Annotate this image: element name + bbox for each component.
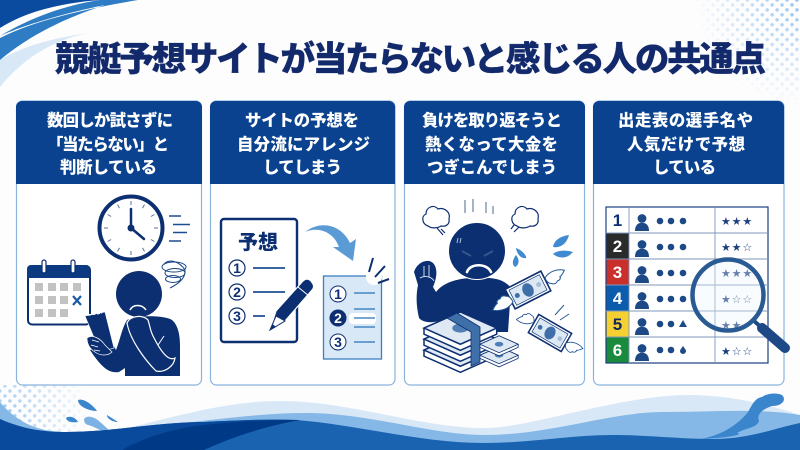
icon: dizzy swirl [162, 261, 186, 288]
icon: pencil [270, 279, 314, 330]
panel 4 heading text [618, 111, 753, 177]
panel 2 header [210, 101, 395, 184]
chart: race card table: 4 [613, 289, 623, 308]
arrow [305, 225, 356, 261]
panel: 出走表の選手名や [593, 101, 785, 385]
chart: race card table: ★☆☆ [721, 293, 753, 306]
icon: rearranged sheet: 3 [334, 334, 342, 350]
panel: 負けを取り返そうと [404, 101, 585, 385]
panel 2 heading text: サイトの予想を [245, 111, 359, 130]
splash: left [66, 400, 118, 430]
panel 2 frame [210, 101, 395, 385]
panel 1 header [16, 101, 202, 184]
icon: flying bill upper [491, 269, 565, 311]
icon: forecast sheet: 2 [233, 284, 241, 300]
panel: 数回しか試さずに [16, 101, 202, 385]
chart: race card table: 2 [613, 237, 622, 256]
title: 競艇予想サイトが当たらないと感じる人の共通点 [55, 40, 766, 79]
panel 1 frame [16, 101, 202, 385]
panel 4 header [593, 101, 784, 184]
icon: angry person [414, 222, 511, 332]
panel 4 heading text: している [653, 159, 716, 177]
panel 1 heading text: 「当たらない」と [47, 135, 169, 154]
chart: race card table: 1 [613, 211, 622, 230]
chart: race card table: ★★★ [721, 267, 753, 280]
icon: forecast sheet [221, 219, 297, 342]
icon: rearranged sheet: 2 [334, 310, 342, 326]
chart: race card table: 3 [613, 263, 622, 282]
bottom waves [0, 395, 800, 450]
panel 1 heading text: 判断している [60, 158, 157, 177]
panel 3 frame [404, 101, 584, 385]
background halftone: top right [703, 0, 800, 96]
panel 1 heading text [47, 111, 173, 177]
panel 4 heading text: 出走表の選手名や [618, 111, 753, 130]
icon: forecast sheet: 3 [233, 308, 241, 324]
chart: race card table: ★★★ [721, 215, 753, 228]
icon: magnifying glass [692, 260, 785, 348]
icon: clock [100, 196, 190, 260]
panel: サイトの予想を [210, 101, 395, 385]
icon: forecast sheet: 予想 [238, 231, 278, 254]
icon: anger clouds and lines [423, 199, 538, 235]
icon: rearranged sheet [324, 258, 389, 359]
icon: stacks of money [424, 312, 518, 372]
icon: rearranged sheet: 1 [334, 286, 342, 302]
panel 1 heading text: 数回しか試さずに [47, 111, 173, 130]
panel 2 heading text: 自分流にアレンジ [237, 135, 370, 154]
icon: flying bill lower [516, 305, 583, 357]
panel 3 heading text: 熱くなって大金を [425, 135, 558, 154]
icon: sweat drops [513, 235, 573, 267]
panel 2 heading text: してしまう [263, 159, 342, 177]
splash: right [700, 394, 784, 439]
panel 3 header [404, 101, 585, 184]
panel 4 heading text: 人気だけで予想 [627, 135, 746, 154]
panel 2 heading text [237, 111, 370, 177]
chart: race card table: 5 [613, 315, 622, 334]
icon: calendar [27, 260, 90, 324]
background halftone: bottom left [0, 385, 81, 432]
icon: worried person with phone [85, 261, 186, 376]
icon: forecast sheet: 1 [233, 260, 241, 276]
chart: race card table: ★☆☆ [721, 345, 753, 358]
chart: race card table: ★★ [721, 319, 742, 332]
top-left wave decoration [0, 0, 138, 87]
chart: race card table: 6 [613, 341, 622, 360]
chart: race card table: ★★☆ [721, 241, 753, 254]
panel 3 heading text: つぎこんでしまう [427, 158, 557, 177]
panel 3 heading text: 負けを取り返そうと [422, 111, 562, 130]
chart: race card table [606, 207, 768, 363]
panel 3 heading text [422, 111, 562, 177]
panel 4 frame [594, 101, 784, 385]
